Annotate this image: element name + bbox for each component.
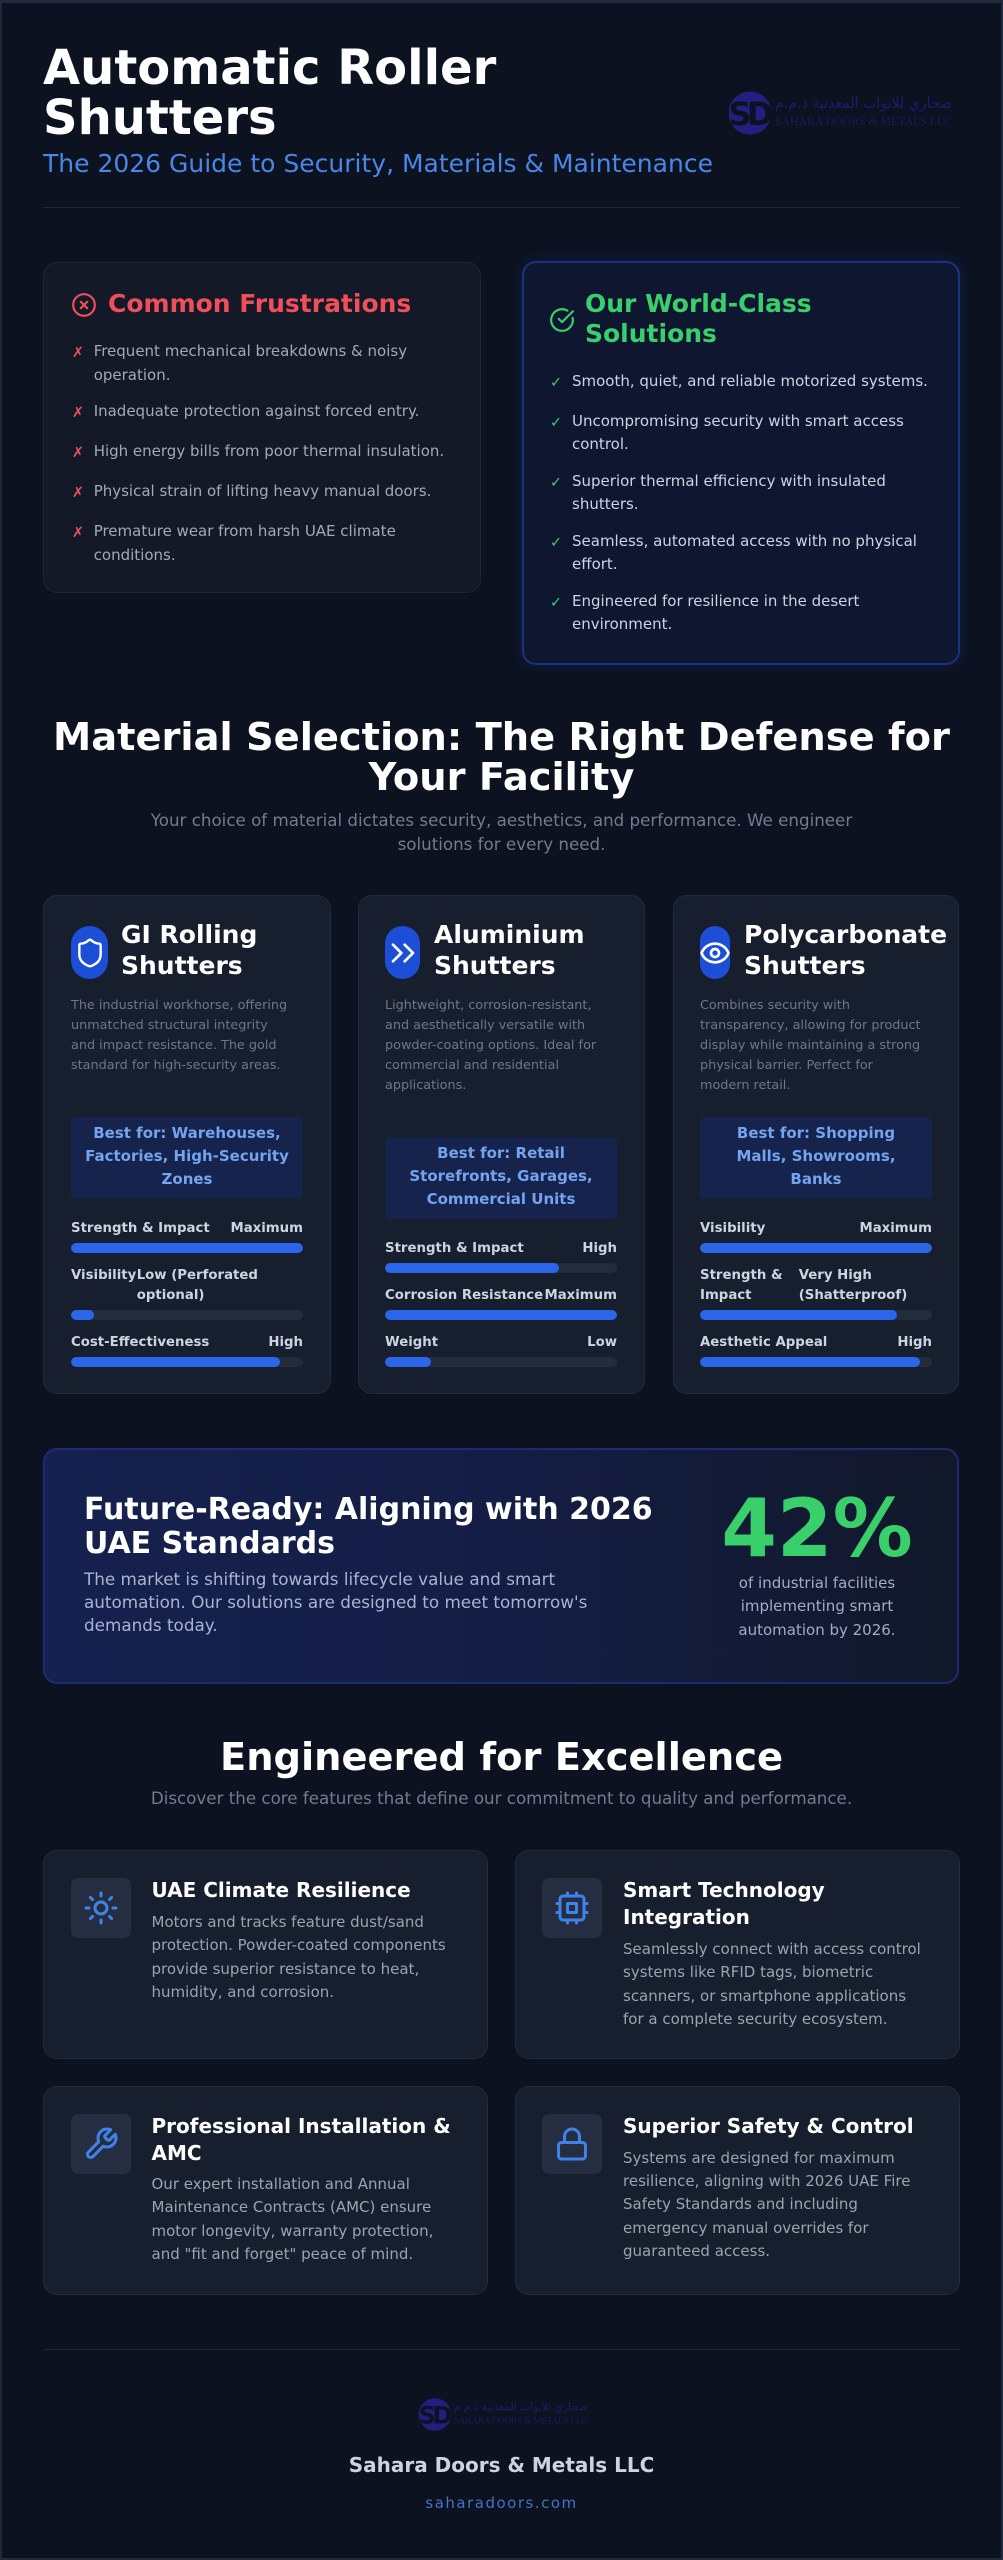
item 4: effort.	[572, 555, 618, 573]
best for box	[385, 1137, 617, 1219]
item 3: ✗	[72, 445, 84, 461]
best for box: Best for: Shopping	[737, 1124, 895, 1142]
metric: visibility	[71, 1268, 303, 1320]
item 5: environment.	[572, 615, 672, 633]
feature text: scanners, or smartphone applications	[623, 1987, 906, 2005]
feature: UAE climate resilience	[43, 1850, 488, 2059]
card title: Aluminium	[434, 920, 585, 949]
best for box: Storefronts, Garages,	[409, 1167, 593, 1185]
metric: strength and impact: Very High	[799, 1268, 872, 1283]
item 5	[72, 522, 396, 564]
section intro: engineered: Discover the core features that define our commitment to quality and performance.	[151, 1788, 852, 1808]
metric: strength and impact: Strength & Impact	[71, 1221, 210, 1236]
statistic caption: automation by 2026.	[738, 1621, 896, 1639]
feature text: Our expert installation and Annual	[152, 2175, 410, 2193]
item 5: conditions.	[94, 546, 176, 564]
item 2: ✓	[550, 415, 562, 431]
card description	[385, 998, 596, 1093]
item 4: ✓	[550, 535, 562, 551]
metric: strength and impact: Maximum	[230, 1221, 303, 1236]
metric: aesthetic appeal: Aesthetic Appeal	[700, 1335, 827, 1350]
header subtitle: The 2026 Guide to Security, Materials & Maintenance	[43, 149, 713, 178]
feature title: Integration	[623, 1905, 750, 1929]
card description: Lightweight, corrosion-resistant,	[385, 998, 592, 1013]
feature: superior safety and control	[515, 2086, 960, 2295]
best for box	[700, 1117, 932, 1199]
metric: visibility	[700, 1221, 932, 1253]
banner text: automation. Our solutions are designed to meet tomorrow's	[84, 1592, 587, 1612]
header logo: SAHARA DOORS & METALS LLC	[775, 114, 952, 128]
card: aluminium shutters	[358, 895, 645, 1394]
card title: Shutters	[121, 951, 243, 980]
feature title	[152, 2114, 451, 2165]
footer website: saharadoors.com	[425, 2494, 578, 2512]
banner text: The market is shifting towards lifecycle value and smart	[84, 1568, 555, 1588]
card title	[434, 920, 585, 980]
icon: chip	[542, 1878, 602, 1938]
section heading: material selection: Material Selection: The Right Defense for	[53, 714, 950, 760]
item 1: ✗	[72, 345, 84, 361]
item 4: ✗	[72, 485, 84, 501]
footer company name: Sahara Doors & Metals LLC	[349, 2453, 654, 2477]
header title: Automatic Roller	[43, 40, 496, 96]
metric: strength and impact: (Shatterproof)	[799, 1288, 907, 1303]
metric: aesthetic appeal: High	[897, 1335, 932, 1350]
item 4: Seamless, automated access with no physical	[572, 532, 917, 550]
best for box: Best for: Warehouses,	[93, 1124, 281, 1142]
item 1: ✓	[550, 375, 562, 391]
card description	[71, 998, 287, 1073]
metric: corrosion resistance	[385, 1288, 617, 1320]
item 5: ✓	[550, 595, 562, 611]
best for box: Zones	[162, 1170, 212, 1188]
section intro: material selection	[150, 810, 852, 854]
card description: modern retail.	[700, 1078, 790, 1093]
feature text: motor longevity, warranty protection,	[152, 2222, 433, 2240]
feature text: provide superior resistance to heat,	[152, 1960, 419, 1978]
banner heading	[84, 1492, 653, 1560]
metric: strength and impact	[700, 1268, 932, 1320]
card description: applications.	[385, 1078, 466, 1093]
icon: lock	[542, 2114, 602, 2174]
banner heading: Future-Ready: Aligning with 2026	[84, 1492, 653, 1526]
card description: and impact resistance. The gold	[71, 1038, 277, 1053]
card title: Shutters	[744, 951, 866, 980]
metric: cost effectiveness: Cost-Effectiveness	[71, 1335, 209, 1350]
icon: eye	[700, 926, 730, 979]
section intro: material selection: Your choice of material dictates security, aesthetics, and performance. We engineer	[151, 810, 852, 830]
card description: standard for high-security areas.	[71, 1058, 280, 1073]
card description: The industrial workhorse, offering	[71, 998, 287, 1013]
section heading: engineered for excellence: Engineered for Excellence	[220, 1735, 783, 1780]
card description: Combines security with	[700, 998, 850, 1013]
item 2: Inadequate protection against forced entry.	[94, 402, 419, 420]
section intro: material selection: solutions for every need.	[398, 834, 605, 854]
best for box: Commercial Units	[427, 1190, 575, 1208]
metric: corrosion resistance: Corrosion Resistance	[385, 1288, 543, 1303]
card description: unmatched structural integrity	[71, 1018, 268, 1033]
metric: strength and impact	[71, 1221, 303, 1253]
card: polycarbonate shutters	[673, 895, 959, 1394]
metric: visibility: Low (Perforated	[137, 1268, 258, 1283]
item 2: Uncompromising security with smart access	[572, 412, 904, 430]
item 5	[550, 592, 860, 633]
card description: commercial and residential	[385, 1058, 559, 1073]
statistic caption: implementing smart	[741, 1597, 893, 1615]
feature text: Seamlessly connect with access control	[623, 1940, 921, 1958]
feature text: Systems are designed for maximum	[623, 2148, 895, 2166]
card description: display while maintaining a strong	[700, 1038, 920, 1053]
card title: GI Rolling	[121, 920, 257, 949]
best for box: Banks	[790, 1170, 842, 1188]
statistic caption: of industrial facilities	[739, 1574, 895, 1592]
feature text	[623, 1940, 921, 2028]
card title	[744, 920, 947, 980]
feature text: systems like RFID tags, biometric	[623, 1963, 873, 1981]
metric: visibility: optional)	[137, 1288, 204, 1303]
icon: sun	[71, 1878, 131, 1938]
metric: corrosion resistance: Maximum	[544, 1288, 617, 1303]
header logo: S	[729, 95, 752, 133]
item 2: control.	[572, 435, 629, 453]
feature text: and "fit and forget" peace of mind.	[152, 2245, 413, 2263]
panel: world-class solutions	[522, 261, 960, 665]
item 5: ✗	[72, 525, 84, 541]
icon: chevrons	[385, 926, 420, 979]
heading: solutions: Solutions	[585, 319, 717, 348]
heading: common frustrations: Common Frustrations	[108, 289, 411, 318]
metric: visibility: Maximum	[859, 1221, 932, 1236]
banner heading: UAE Standards	[84, 1526, 335, 1560]
item 5: Premature wear from harsh UAE climate	[94, 522, 396, 540]
footer logo	[419, 2397, 588, 2432]
item 3: shutters.	[572, 495, 639, 513]
metric: weight	[385, 1335, 617, 1367]
card description: powder-coating options. Ideal for	[385, 1038, 596, 1053]
best for box: Malls, Showrooms,	[736, 1147, 896, 1165]
heading: solutions	[585, 289, 812, 348]
header logo: D	[747, 95, 773, 133]
metric: aesthetic appeal	[700, 1335, 932, 1367]
footer logo: S	[419, 2402, 436, 2430]
section heading: material selection: Your Facility	[369, 754, 634, 800]
feature text	[152, 1913, 446, 2001]
feature text: Safety Standards and including	[623, 2195, 858, 2213]
icon: wrench	[71, 2114, 131, 2174]
best for box	[71, 1117, 303, 1199]
feature text	[152, 2175, 433, 2263]
item 3	[550, 472, 886, 513]
metric: strength and impact: Impact	[700, 1288, 752, 1303]
item 3: Superior thermal efficiency with insulated	[572, 472, 886, 490]
feature: smart technology integration	[515, 1850, 960, 2059]
metric: visibility: Visibility	[71, 1268, 136, 1283]
card title: Shutters	[434, 951, 556, 980]
feature title	[623, 1878, 825, 1929]
metric: cost effectiveness	[71, 1335, 303, 1367]
metric: cost effectiveness: High	[268, 1335, 303, 1350]
card title: Polycarbonate	[744, 920, 947, 949]
item 4	[550, 532, 917, 573]
header title: Shutters	[43, 90, 277, 146]
section heading: material selection	[53, 714, 950, 800]
best for box: Best for: Retail	[437, 1144, 565, 1162]
feature title: Superior Safety & Control	[623, 2114, 914, 2138]
item 1	[72, 342, 407, 384]
card description: and aesthetically versatile with	[385, 1018, 585, 1033]
header logo	[729, 92, 952, 134]
feature title: AMC	[152, 2141, 202, 2165]
item 1: Frequent mechanical breakdowns & noisy	[94, 342, 407, 360]
feature text: resilience, aligning with 2026 UAE Fire	[623, 2172, 910, 2190]
card description	[700, 998, 921, 1093]
metric: strength and impact: Strength & Impact	[385, 1241, 524, 1256]
metric: strength and impact: High	[582, 1241, 617, 1256]
metric: weight: Low	[587, 1335, 617, 1350]
statistic caption	[738, 1574, 896, 1639]
footer logo: SAHARA DOORS & METALS LLC	[454, 2416, 587, 2426]
metric: weight: Weight	[385, 1335, 438, 1350]
feature text: for a complete security ecosystem.	[623, 2010, 888, 2028]
feature text: guaranteed access.	[623, 2242, 770, 2260]
feature title: UAE Climate Resilience	[152, 1878, 411, 1902]
heading: solutions: Our World-Class	[585, 289, 812, 318]
metric: visibility: Visibility	[700, 1221, 765, 1236]
card title	[121, 920, 257, 980]
banner: future ready	[43, 1448, 959, 1684]
icon: x circle	[72, 293, 96, 317]
item 2	[550, 412, 904, 453]
icon: check circle	[550, 308, 574, 332]
feature text: Maintenance Contracts (AMC) ensure	[152, 2198, 431, 2216]
panel: common frustrations	[43, 262, 481, 593]
item 5: Engineered for resilience in the desert	[572, 592, 859, 610]
card description: physical barrier. Perfect for	[700, 1058, 873, 1073]
header title	[43, 40, 496, 146]
item 3: ✓	[550, 475, 562, 491]
feature title: Smart Technology	[623, 1878, 825, 1902]
item 1: operation.	[94, 366, 170, 384]
card: GI rolling shutters	[43, 895, 331, 1394]
banner text: demands today.	[84, 1615, 218, 1635]
footer logo: D	[432, 2402, 452, 2430]
best for box: Factories, High-Security	[85, 1147, 289, 1165]
feature text	[623, 2146, 910, 2264]
icon: shield	[71, 926, 108, 979]
statistic: 42 percent: 42%	[721, 1482, 913, 1575]
feature text: Motors and tracks feature dust/sand	[152, 1913, 424, 1931]
banner text	[84, 1568, 587, 1635]
item 3: High energy bills from poor thermal insulation.	[94, 442, 444, 460]
card description: transparency, allowing for product	[700, 1018, 921, 1033]
feature: professional installation and AMC	[43, 2086, 488, 2295]
metric: strength and impact: Strength &	[700, 1268, 783, 1283]
item 1: Smooth, quiet, and reliable motorized systems.	[572, 372, 928, 390]
feature title: Professional Installation &	[152, 2114, 451, 2138]
feature text: protection. Powder-coated components	[152, 1936, 446, 1954]
feature text: emergency manual overrides for	[623, 2219, 869, 2237]
feature text: humidity, and corrosion.	[152, 1983, 334, 2001]
item 2: ✗	[72, 405, 84, 421]
metric: strength and impact	[385, 1241, 617, 1273]
item 4: Physical strain of lifting heavy manual doors.	[94, 482, 431, 500]
